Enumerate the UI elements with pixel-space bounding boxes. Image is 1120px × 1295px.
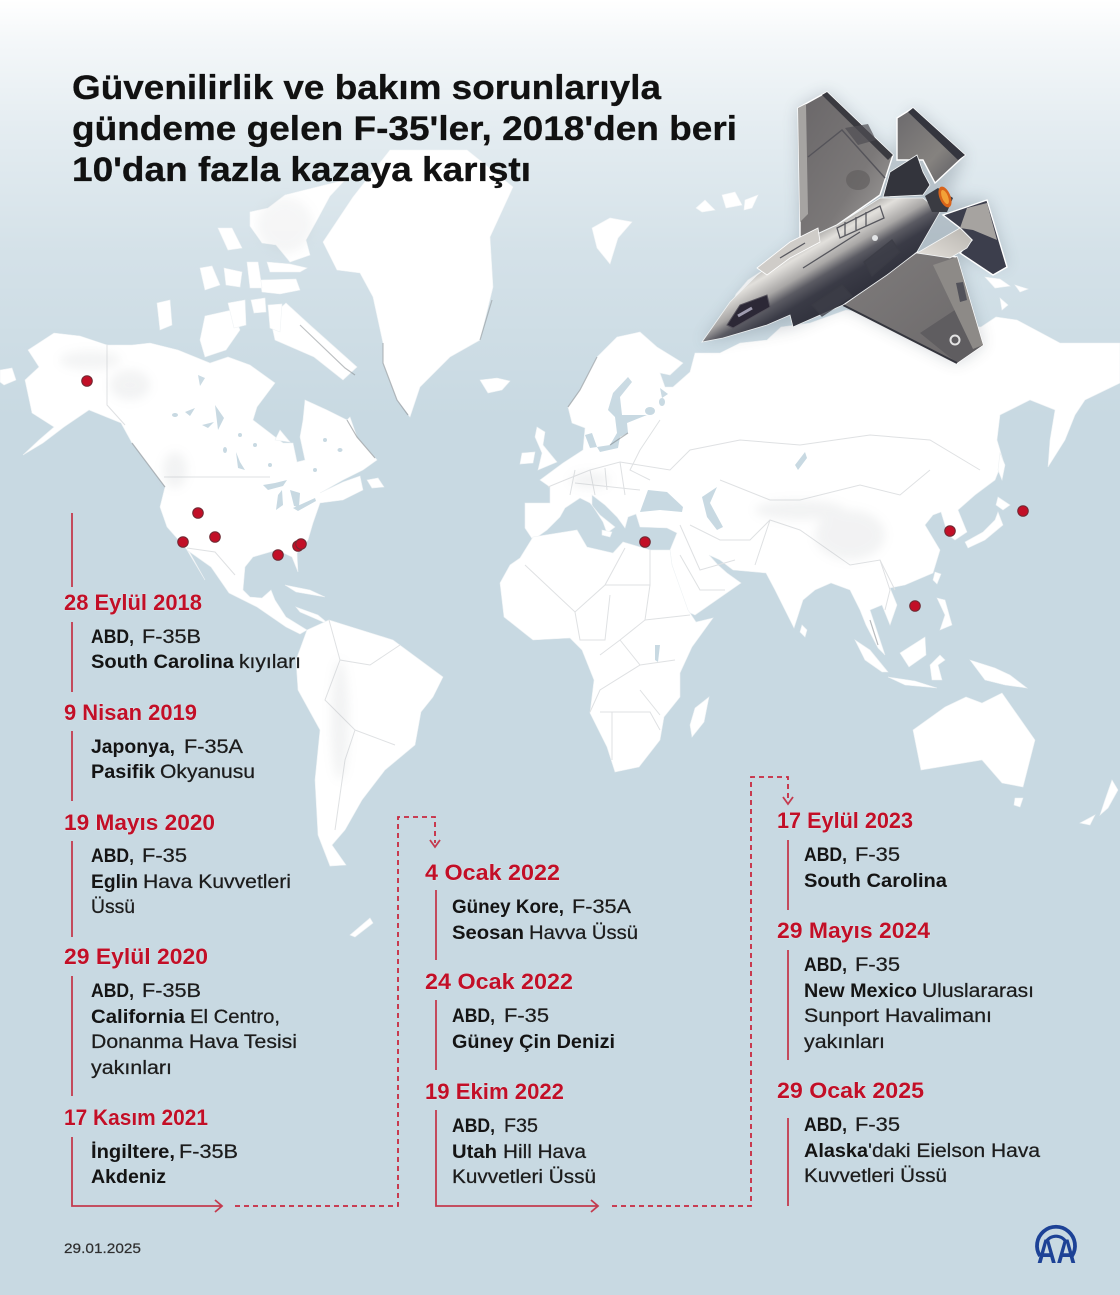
timeline column 3 connectors <box>787 840 789 1206</box>
aircraft: lower wing <box>843 252 983 363</box>
aircraft: lower fin <box>917 228 972 258</box>
timeline entry: 17 Eylül 2023: F-35 <box>855 845 900 866</box>
coast relief shading <box>132 300 878 645</box>
land: islands <box>0 192 1118 937</box>
timeline entry: 29 Ocak 2025: 29 Ocak 2025 <box>777 1078 924 1103</box>
aircraft: upper stabilizer <box>897 108 965 183</box>
aircraft: canopy <box>727 295 770 328</box>
aircraft: lower stabilizer <box>943 200 1007 275</box>
aircraft: upper fin <box>883 155 930 197</box>
timeline entry: 17 Eylül 2023 <box>777 808 947 892</box>
accident location markers <box>82 376 1028 611</box>
timeline entry: 24 Ocak 2022: F-35 <box>504 1006 549 1027</box>
land: Iceland <box>480 378 510 393</box>
timeline entry: 19 Mayıs 2020: ABD, <box>91 846 134 867</box>
borders <box>107 345 980 830</box>
timeline entry: 29 Mayıs 2024: Uluslararası <box>922 981 1034 1002</box>
aircraft: fuselage <box>702 198 940 342</box>
land: North America <box>23 333 377 634</box>
aircraft: wing roundel <box>950 336 960 344</box>
timeline column 1 connectors <box>72 513 440 1212</box>
timeline entry: 19 Mayıs 2020: Hava Kuvvetleri <box>143 872 291 893</box>
timeline entry: 24 Ocak 2022 <box>425 969 615 1053</box>
timeline entry: 17 Eylül 2023: 17 Eylül 2023 <box>777 808 913 833</box>
timeline entry: 17 Kasım 2021 <box>64 1105 238 1188</box>
timeline entry: 29 Ocak 2025: 'daki Eielson Hava <box>868 1141 1040 1162</box>
timeline entry: 29 Eylül 2020: Donanma Hava Tesisi <box>91 1032 297 1053</box>
timeline entry: 19 Mayıs 2020: F-35 <box>142 846 187 867</box>
timeline entry: 9 Nisan 2019 <box>64 700 255 783</box>
timeline column 2 connectors <box>436 777 793 1212</box>
timeline entry: 29 Ocak 2025: ABD, <box>804 1115 847 1136</box>
title: gündeme gelen F-35'ler, 2018'den beri <box>72 110 737 148</box>
timeline entry: 28 Eylül 2018: kıyıları <box>239 652 301 673</box>
timeline entry: 4 Ocak 2022: Seosan <box>452 923 524 944</box>
timeline entry: 17 Kasım 2021: İngiltere, <box>91 1142 175 1163</box>
timeline entry: 29 Ocak 2025: Alaska <box>804 1141 868 1162</box>
timeline entry: 28 Eylül 2018: 28 Eylül 2018 <box>64 590 202 615</box>
top fade overlay <box>0 0 1120 420</box>
timeline entry: 4 Ocak 2022: Güney Kore, <box>452 897 564 918</box>
aircraft: leading edge extension <box>757 228 820 275</box>
timeline entry: 29 Mayıs 2024: ABD, <box>804 955 847 976</box>
timeline entry: 19 Mayıs 2020 <box>64 810 291 918</box>
timeline entry: 29 Eylül 2020: El Centro, <box>190 1007 280 1028</box>
aircraft: engine nozzle <box>925 185 954 212</box>
timeline entry: 28 Eylül 2018 <box>64 590 301 673</box>
timeline entry: 17 Kasım 2021: 17 Kasım 2021 <box>64 1105 208 1130</box>
title <box>72 69 737 189</box>
Anadolu Agency logo: AA <box>1037 1233 1076 1271</box>
title: Güvenilirlik ve bakım sorunlarıyla <box>72 69 662 107</box>
timeline entry: 4 Ocak 2022: Havva Üssü <box>529 923 638 944</box>
timeline entry: 4 Ocak 2022: 4 Ocak 2022 <box>425 860 560 885</box>
timeline entry: 29 Ocak 2025 <box>777 1078 1040 1187</box>
title: 10'dan fazla kazaya karıştı <box>72 151 531 189</box>
timeline entry: 28 Eylül 2018: South Carolina <box>91 652 234 673</box>
aircraft: upper wing <box>798 92 893 242</box>
timeline entry: 19 Ekim 2022: Utah <box>452 1142 497 1163</box>
timeline entry: 29 Ocak 2025: Kuvvetleri Üssü <box>804 1166 947 1187</box>
footer date: 29.01.2025 <box>64 1240 141 1256</box>
timeline entry: 19 Ekim 2022: Hill Hava <box>503 1142 586 1163</box>
timeline entry: 29 Eylül 2020: 29 Eylül 2020 <box>64 944 208 969</box>
timeline entry: 29 Eylül 2020 <box>64 944 297 1079</box>
timeline entry: 9 Nisan 2019: Okyanusu <box>160 762 255 783</box>
timeline entry: 24 Ocak 2022: 24 Ocak 2022 <box>425 969 573 994</box>
land: Eurasia <box>525 310 1120 655</box>
timeline entry: 29 Mayıs 2024: F-35 <box>855 955 900 976</box>
timeline entry: 19 Ekim 2022: 19 Ekim 2022 <box>425 1079 564 1104</box>
timeline entry: 17 Kasım 2021: Akdeniz <box>91 1167 166 1188</box>
land: Arctic Canada islands <box>157 180 384 625</box>
world map <box>0 150 1120 937</box>
timeline entry: 19 Ekim 2022 <box>425 1079 596 1188</box>
timeline entry: 19 Ekim 2022: Kuvvetleri Üssü <box>452 1167 596 1188</box>
F-35 aircraft <box>702 92 1007 363</box>
timeline entry: 29 Mayıs 2024 <box>777 918 1034 1053</box>
land: South America <box>296 620 443 866</box>
timeline entry: 24 Ocak 2022: Güney Çin Denizi <box>452 1032 615 1053</box>
timeline entry: 9 Nisan 2019: 9 Nisan 2019 <box>64 700 197 725</box>
timeline entry: 19 Mayıs 2020: Eglin <box>91 872 138 893</box>
timeline entry: 19 Mayıs 2020: 19 Mayıs 2020 <box>64 810 215 835</box>
timeline entry: 29 Mayıs 2024: 29 Mayıs 2024 <box>777 918 931 943</box>
timeline entry: 28 Eylül 2018: F-35B <box>142 627 201 648</box>
timeline entry: 17 Kasım 2021: F-35B <box>179 1142 238 1163</box>
inland water and seas <box>172 375 807 662</box>
timeline entry: 28 Eylül 2018: ABD, <box>91 627 134 648</box>
timeline entry: 29 Eylül 2020: yakınları <box>91 1058 172 1079</box>
timeline entry: 19 Ekim 2022: ABD, <box>452 1116 495 1137</box>
timeline entry: 29 Eylül 2020: F-35B <box>142 981 201 1002</box>
timeline entry: 19 Mayıs 2020: Üssü <box>91 897 135 918</box>
timeline entry: 17 Eylül 2023: ABD, <box>804 845 847 866</box>
timeline entry: 29 Mayıs 2024: yakınları <box>804 1032 885 1053</box>
timeline entry: 29 Mayıs 2024: New Mexico <box>804 981 917 1002</box>
timeline entry: 29 Eylül 2020: ABD, <box>91 981 134 1002</box>
terrain shading <box>60 197 885 780</box>
timeline entry: 24 Ocak 2022: ABD, <box>452 1006 495 1027</box>
aircraft: panel details <box>780 206 900 316</box>
timeline entry: 29 Mayıs 2024: Sunport Havalimanı <box>804 1006 992 1027</box>
timeline entry: 29 Eylül 2020: California <box>91 1007 185 1028</box>
timeline entry: 9 Nisan 2019: Japonya, <box>91 737 175 758</box>
timeline entry: 19 Ekim 2022: F35 <box>504 1116 538 1137</box>
land: Greenland <box>323 150 513 417</box>
land: Africa <box>500 530 713 772</box>
timeline entry: 9 Nisan 2019: Pasifik <box>91 762 155 783</box>
timeline entry: 29 Ocak 2025: F-35 <box>855 1115 900 1136</box>
timeline entry: 4 Ocak 2022 <box>425 860 638 944</box>
aircraft: fuselage roundel <box>872 235 878 241</box>
timeline entry: 4 Ocak 2022: F-35A <box>572 897 631 918</box>
timeline entry: 17 Eylül 2023: South Carolina <box>804 871 947 892</box>
timeline entry: 9 Nisan 2019: F-35A <box>184 737 243 758</box>
land: Australia <box>913 693 1035 787</box>
